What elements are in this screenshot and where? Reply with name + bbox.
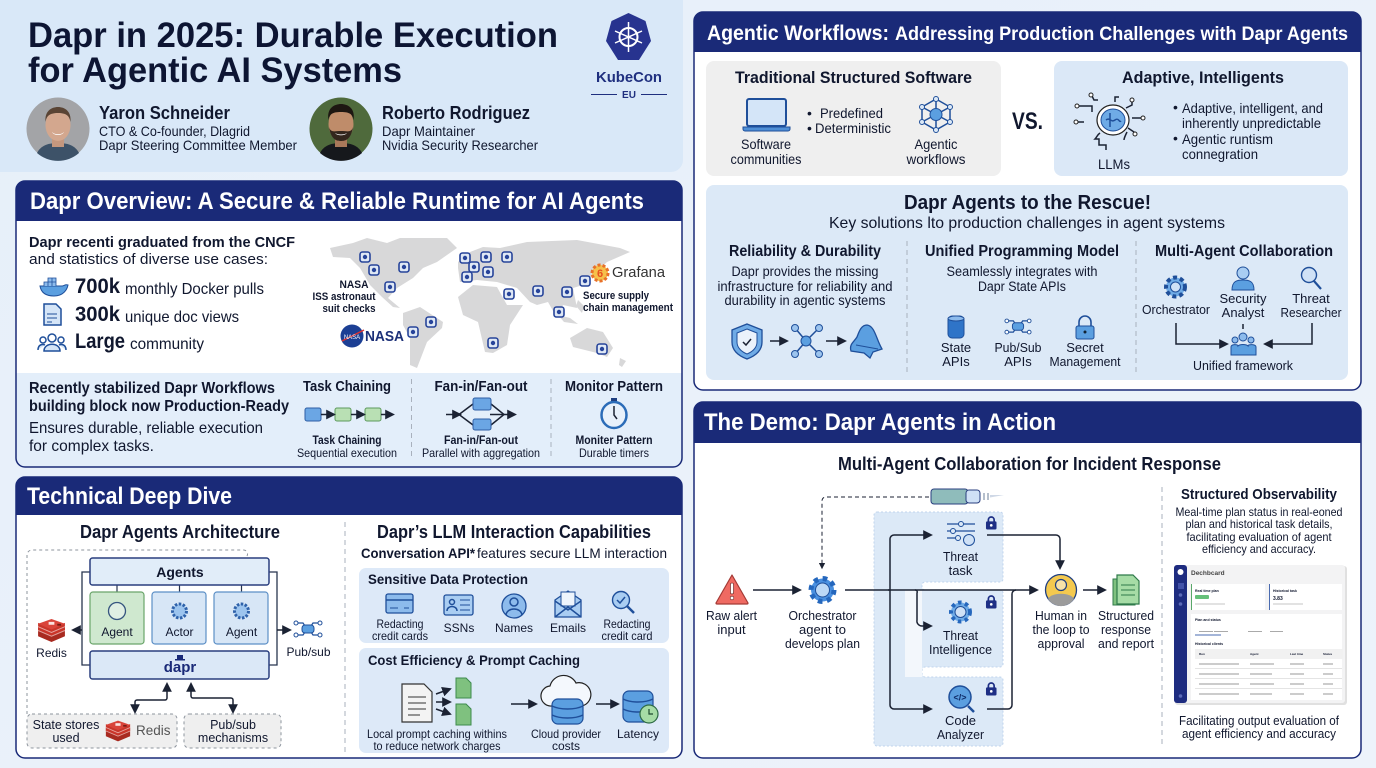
pattern: fan-in fan-out: Parallel with aggregation xyxy=(422,446,540,460)
speaker photo: Roberto Rodriguez xyxy=(310,98,372,161)
panel heading: Agentic Workflows: xyxy=(707,22,889,45)
panel heading xyxy=(694,402,1361,443)
pattern: monitor: Monitor Pattern xyxy=(565,379,663,395)
redis output xyxy=(36,619,82,660)
observability text xyxy=(1176,486,1342,556)
title: for Agentic AI Systems xyxy=(28,51,402,90)
connector from security analyst xyxy=(1242,324,1244,329)
local prompt caching: to reduce network charges xyxy=(374,739,500,753)
agent card blue: Agent xyxy=(226,625,258,639)
label: raw alert input: input xyxy=(717,622,746,637)
rescue heading: Dapr Agents to the Rescue! xyxy=(904,192,1151,214)
card: adaptive intelligents: LLMs xyxy=(1098,156,1130,172)
observability text: efficiency and accuracy. xyxy=(1202,542,1316,556)
callout: Grafana: Grafana xyxy=(612,264,666,281)
workflows text: building block now Production-Ready xyxy=(29,398,289,415)
actor card: Actor xyxy=(165,625,194,639)
dapr runtime bar: dapr xyxy=(164,659,196,676)
stat: doc views: 300k xyxy=(75,303,120,326)
agent card green: Agent xyxy=(101,625,133,639)
speaker details: Yaron Schneider: Yaron Schneider xyxy=(99,103,230,123)
stat: doc views: unique doc views xyxy=(125,309,239,326)
agent: threat researcher: Threat xyxy=(1292,291,1330,306)
cloud provider costs: Cloud provider xyxy=(531,727,601,741)
state stores box: used xyxy=(52,731,80,745)
card: traditional software: Traditional Structured Software xyxy=(735,68,972,87)
stat: community xyxy=(75,330,204,353)
item: emails xyxy=(550,591,586,635)
agents bar xyxy=(90,558,269,585)
observability text: facilitating evaluation of agent xyxy=(1186,530,1332,544)
column: multi-agent collaboration: Multi-Agent Collaboration xyxy=(1155,243,1333,260)
icon: raw alert xyxy=(716,575,748,604)
LLM capabilities heading xyxy=(361,522,667,561)
pattern: fan-in fan-out: Fan-in/Fan-out xyxy=(434,379,528,395)
LLM capabilities heading: Dapr’s LLM Interaction Capabilities xyxy=(377,522,651,542)
callout: NASA: suit checks xyxy=(322,303,376,315)
label: human in the loop: approval xyxy=(1038,636,1085,651)
observability text: Meal-time plan status in real-eoned xyxy=(1176,505,1342,519)
panel heading: Addressing Production Challenges with Dapr Agents xyxy=(895,24,1348,45)
label: report xyxy=(1098,608,1154,651)
item: pub/sub APIs xyxy=(994,319,1042,369)
dashboard screenshot: Last time xyxy=(1290,652,1304,656)
label: human in the loop xyxy=(1032,608,1090,651)
bullets: • xyxy=(1173,99,1178,115)
icon: team xyxy=(1231,333,1256,355)
dashboard screenshot: Run xyxy=(1199,652,1205,656)
pattern: task chaining: Task Chaining xyxy=(303,379,391,395)
panel: technical deep dive xyxy=(16,477,682,758)
connector arrow to pub/sub mechanisms xyxy=(191,684,233,712)
card: traditional software xyxy=(706,61,1001,176)
bullets: • xyxy=(807,120,812,136)
agent: code analyzer: Code xyxy=(945,713,976,728)
workflows text xyxy=(29,380,289,455)
card: dapr agents to the rescue xyxy=(706,185,1348,380)
speaker details: Yaron Schneider xyxy=(99,103,297,153)
icon: resilience shape xyxy=(851,325,882,358)
panel: agentic workflows xyxy=(694,12,1361,390)
callout: NASA: NASA xyxy=(365,328,404,345)
label: human in the loop: Human in xyxy=(1035,608,1087,623)
callout: NASA xyxy=(312,279,404,348)
speaker details: Roberto Rodriguez: Dapr Maintainer xyxy=(382,123,475,139)
label: orchestrator: develops plan xyxy=(785,636,860,651)
agent: code analyzer: Analyzer xyxy=(937,727,985,742)
connector from threat researcher xyxy=(1265,323,1312,344)
item: credit cards xyxy=(372,594,428,643)
pattern: fan-in fan-out xyxy=(422,379,540,460)
label: software communities xyxy=(730,136,802,167)
pub/sub output xyxy=(277,621,331,659)
observability caption: Facilitating output evaluation of xyxy=(1179,714,1339,728)
agent: threat task: task xyxy=(949,563,973,578)
item: credit cards: credit cards xyxy=(372,629,428,643)
item: state APIs: State xyxy=(941,340,971,355)
column: reliability and durability xyxy=(718,243,892,359)
column: multi-agent collaboration: Unified framework xyxy=(1193,358,1293,373)
agent: threat researcher: Researcher xyxy=(1280,305,1342,320)
workflows text: Ensures durable, reliable execution xyxy=(29,420,263,437)
bullets: • xyxy=(1173,130,1178,146)
agent: threat researcher xyxy=(1280,268,1342,320)
column: unified programming model xyxy=(925,243,1121,369)
callout: Grafana: 6 xyxy=(597,268,603,280)
item: state APIs xyxy=(941,316,971,369)
icon: orchestrator gear xyxy=(811,578,834,602)
pattern: task chaining: Sequential execution xyxy=(297,446,397,460)
agent: security analyst: Security xyxy=(1220,291,1267,306)
item: state APIs: APIs xyxy=(942,354,970,369)
intro text xyxy=(29,234,295,268)
bullets: • xyxy=(807,105,812,121)
dashboard screenshot xyxy=(1174,565,1347,705)
panel heading: Dapr Overview: A Secure & Reliable Runtime for AI Agents xyxy=(30,188,644,215)
column: multi-agent collaboration xyxy=(1142,243,1342,373)
flow lines xyxy=(845,535,1060,709)
observability caption: agent efficiency and accuracy xyxy=(1182,727,1337,741)
card: adaptive intelligents xyxy=(1054,61,1348,176)
state stores box xyxy=(27,714,177,748)
label: agentic workflows: Agentic xyxy=(914,136,958,152)
pattern: monitor: Moniter Pattern xyxy=(576,433,652,447)
cloud provider costs: costs xyxy=(552,739,580,753)
agent: security analyst: Analyst xyxy=(1222,305,1265,320)
agent: code analyzer xyxy=(937,683,997,742)
icon: report xyxy=(1113,575,1139,605)
connector from orchestrator xyxy=(1176,323,1227,344)
column: unified programming model: Unified Programming Model xyxy=(925,243,1119,260)
bullets: Adaptive, intelligent, and xyxy=(1182,100,1323,116)
pattern: fan-in fan-out: Fan-in/Fan-out xyxy=(444,433,518,447)
item: secret management xyxy=(1050,316,1121,369)
latency: Latency xyxy=(617,727,659,741)
label: agentic workflows xyxy=(906,136,966,167)
pub/sub mechanisms box xyxy=(184,714,281,748)
connector arrow to state stores xyxy=(135,684,167,712)
bullets xyxy=(1173,99,1323,162)
observability caption xyxy=(1179,714,1339,741)
speaker details: Roberto Rodriguez: Nvidia Security Researcher xyxy=(382,137,538,153)
dashboard screenshot: Agent xyxy=(1250,652,1258,656)
dashboard screenshot: Dechbcard xyxy=(1191,570,1225,577)
icon: network xyxy=(920,96,952,132)
label: orchestrator: agent to xyxy=(799,622,846,637)
item: SSNs xyxy=(444,595,474,635)
rescue heading xyxy=(829,192,1225,232)
redis output: Redis xyxy=(36,646,67,660)
agent: orchestrator xyxy=(1142,278,1211,317)
icon: document xyxy=(44,304,61,325)
stat: docker pulls xyxy=(75,275,264,298)
label: orchestrator xyxy=(785,608,860,651)
callout: NASA: ISS astronaut xyxy=(312,291,376,303)
agent group zone xyxy=(874,512,1003,746)
pattern: monitor xyxy=(565,379,663,460)
dashboard screenshot: Status xyxy=(1323,652,1332,656)
pattern: task chaining xyxy=(297,379,397,460)
intro text: and statistics of diverse use cases: xyxy=(29,251,268,268)
state stores box: Redis xyxy=(136,723,171,738)
icon: graph xyxy=(792,324,822,358)
logo: KubeCon EU: EU xyxy=(622,90,636,101)
agent card blue xyxy=(214,592,268,644)
logo: KubeCon EU: KubeCon xyxy=(596,69,662,86)
icon: laptop xyxy=(743,99,790,131)
agent: security analyst xyxy=(1220,267,1267,320)
callout: Grafana xyxy=(583,264,673,314)
item: names xyxy=(495,594,533,635)
subheading: architecture: Dapr Agents Architecture xyxy=(80,522,280,542)
speaker photo: Yaron Schneider xyxy=(26,98,90,161)
local prompt caching: Local prompt caching withins xyxy=(367,727,507,741)
item: redacting credit card: Redacting xyxy=(604,617,650,631)
item: credit cards: Redacting xyxy=(376,617,424,631)
icon: community xyxy=(38,334,66,351)
agents bar: Agents xyxy=(156,564,204,580)
local prompt caching xyxy=(367,678,507,753)
bullets: Deterministic xyxy=(815,120,891,136)
dashboard screenshot: 3.83 xyxy=(1273,596,1283,602)
bullets: inherently unpredictable xyxy=(1182,115,1321,131)
workflows text: Recently stabilized Dapr Workflows xyxy=(29,380,275,397)
agent: threat intelligence: Intelligence xyxy=(929,642,992,657)
architecture diagram xyxy=(27,550,331,748)
stat: community: community xyxy=(130,336,204,353)
observability text: plan and historical task details, xyxy=(1186,517,1332,531)
pattern: task chaining: Task Chaining xyxy=(312,433,382,447)
label: software communities: Software xyxy=(741,136,791,152)
LLM capabilities heading: features secure LLM interaction xyxy=(477,545,667,561)
LLM capabilities heading: Conversation API* xyxy=(361,545,476,561)
agent: code analyzer: </> xyxy=(953,692,967,702)
rescue heading: Key solutions lto production challenges in agent systems xyxy=(829,215,1225,232)
label: raw alert input xyxy=(706,608,757,637)
intro text: Dapr recenti graduated from the CNCF xyxy=(29,234,295,251)
label: orchestrator: Orchestrator xyxy=(788,608,857,623)
callout: NASA: NASA xyxy=(340,279,369,291)
item: redacting credit card xyxy=(602,592,652,643)
panel heading xyxy=(694,12,1361,52)
column: reliability and durability: infrastructure for reliability and xyxy=(718,279,892,294)
panel heading xyxy=(16,477,682,515)
actor card xyxy=(152,592,206,644)
column: unified programming model: Dapr State APIs xyxy=(978,279,1066,294)
dapr runtime bar xyxy=(90,651,269,679)
label: software communities: communities xyxy=(730,151,802,167)
speaker details: Yaron Schneider: CTO & Co-founder, Dlagrid xyxy=(99,123,250,139)
observability text: Structured Observability xyxy=(1181,486,1338,503)
item: secret management: Secret xyxy=(1066,340,1104,355)
state stores box: State stores xyxy=(33,718,99,732)
label: report: Structured xyxy=(1098,608,1154,623)
card: sensitive data protection xyxy=(359,568,669,643)
bullets: Agentic runtism xyxy=(1182,131,1273,147)
capsule and dashed feedback arrow xyxy=(822,489,1004,568)
logo: KubeCon EU xyxy=(591,13,667,101)
column: reliability and durability: Dapr provides the missing xyxy=(732,264,878,279)
header banner xyxy=(0,0,683,172)
label: raw alert input: Raw alert xyxy=(706,608,757,623)
dashboard screenshot: Real time plan xyxy=(1195,589,1219,593)
icon: brain xyxy=(1074,93,1145,150)
agent: threat intelligence xyxy=(929,596,997,657)
subheading: Multi-Agent Collaboration for Incident Response xyxy=(838,454,1221,474)
label: agentic workflows: workflows xyxy=(906,151,966,167)
item: secret management: Management xyxy=(1050,354,1121,369)
workflows text: for complex tasks. xyxy=(29,438,154,455)
latency xyxy=(617,691,659,741)
icon: shield xyxy=(732,324,762,359)
column: reliability and durability: Reliability & Durability xyxy=(729,243,881,260)
pub/sub mechanisms box: Pub/sub xyxy=(210,718,256,732)
card: cost efficiency xyxy=(359,648,669,753)
label: report: and report xyxy=(1098,636,1154,651)
pattern: monitor: Durable timers xyxy=(579,446,649,460)
column: reliability and durability: durability in agentic systems xyxy=(724,293,886,308)
item: redacting credit card: credit card xyxy=(602,629,652,643)
column: unified programming model: Seamlessly integrates with xyxy=(946,264,1098,279)
item: emails: Emails xyxy=(550,621,586,635)
callout: Grafana: Secure supply xyxy=(583,290,650,302)
panel heading xyxy=(16,181,682,221)
card: cost efficiency: Cost Efficiency & Prompt Caching xyxy=(368,652,580,668)
agent card green xyxy=(90,592,144,644)
dashboard screenshot: Historical clients xyxy=(1195,642,1223,646)
stat: docker pulls: monthly Docker pulls xyxy=(125,281,264,298)
bullets: connegration xyxy=(1182,146,1258,162)
agent: orchestrator: Orchestrator xyxy=(1142,302,1211,317)
panel: Dapr overview xyxy=(16,181,682,467)
panel heading: Technical Deep Dive xyxy=(27,483,232,510)
icon: docker whale xyxy=(40,278,68,296)
item: pub/sub APIs: Pub/Sub xyxy=(994,340,1042,355)
stat: community: Large xyxy=(75,330,125,353)
versus label: VS. xyxy=(1012,108,1043,135)
card: sensitive data protection: Sensitive Data Protection xyxy=(368,571,528,587)
speaker details: Roberto Rodriguez xyxy=(382,103,538,153)
agent: threat intelligence: Threat xyxy=(943,628,978,643)
callout: NASA: NASA xyxy=(344,335,360,341)
pub/sub output: Pub/sub xyxy=(286,645,331,659)
cloud provider costs xyxy=(531,675,601,753)
world map of adopters xyxy=(330,238,630,368)
stat: docker pulls: 700k xyxy=(75,275,120,298)
title: Dapr in 2025: Durable Execution xyxy=(28,16,558,55)
speaker details: Roberto Rodriguez: Roberto Rodriguez xyxy=(382,103,530,123)
item: SSNs: SSNs xyxy=(444,621,474,635)
item: pub/sub APIs: APIs xyxy=(1004,354,1032,369)
icon: human in the loop xyxy=(1046,574,1076,606)
dashboard screenshot: Plan and status xyxy=(1195,618,1221,622)
item: names: Names xyxy=(495,621,533,635)
speaker details: Yaron Schneider: Dapr Steering Committee Member xyxy=(99,137,297,153)
panel: the demo xyxy=(694,402,1361,758)
agent: threat task: Threat xyxy=(943,549,978,564)
pub/sub mechanisms box: mechanisms xyxy=(198,731,268,745)
label: human in the loop: the loop to xyxy=(1032,622,1090,637)
label: report: response xyxy=(1101,622,1151,637)
panel heading: The Demo: Dapr Agents in Action xyxy=(704,409,1056,436)
agent: threat task xyxy=(943,517,997,578)
title xyxy=(28,16,558,90)
card: adaptive intelligents: Adaptive, Intelligents xyxy=(1122,68,1284,87)
stat: doc views xyxy=(75,303,239,326)
bullets xyxy=(807,105,891,136)
dashboard screenshot: Historical task xyxy=(1273,589,1297,593)
callout: Grafana: chain management xyxy=(583,302,673,314)
bullets: Predefined xyxy=(820,105,883,121)
